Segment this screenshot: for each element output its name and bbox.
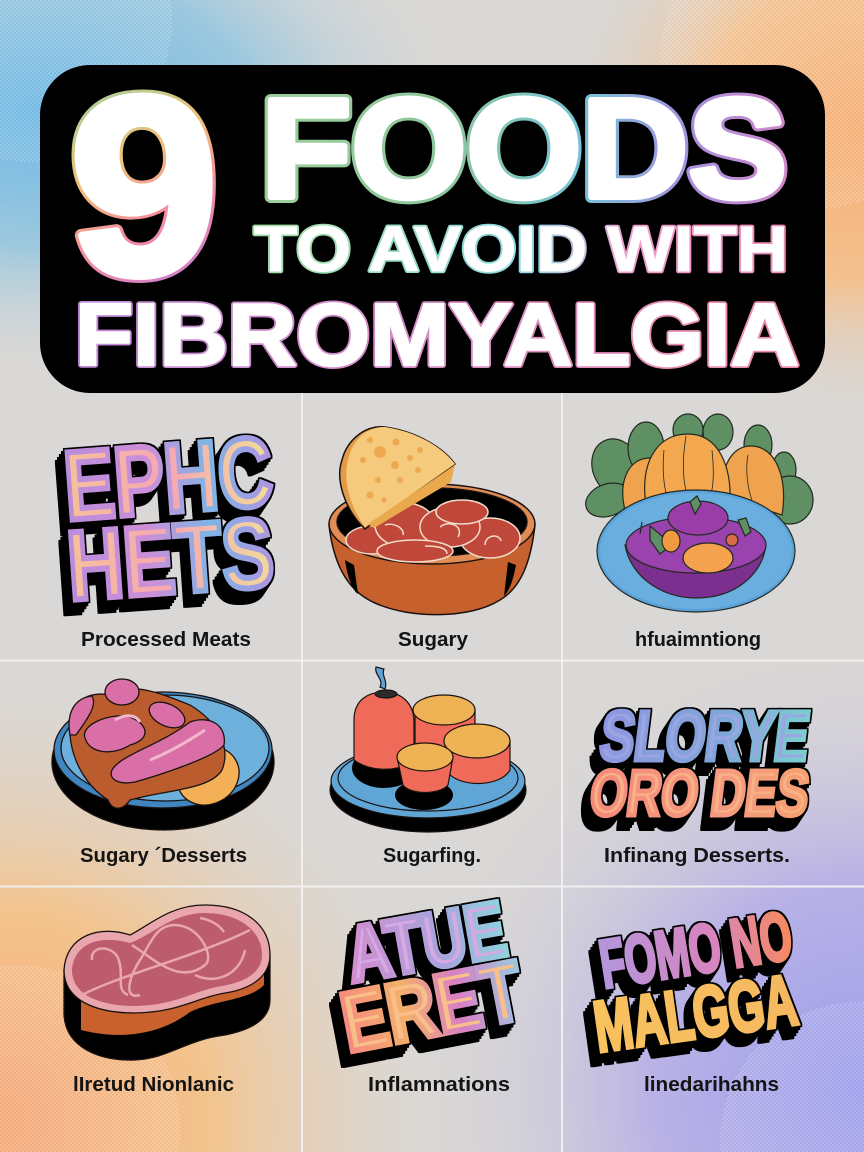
heading: TO AVOID WITH: TO AVOID WITH <box>254 213 788 285</box>
lettering: ATUE ERET: ERET <box>333 943 530 1070</box>
lettering: ATUE ERET <box>333 884 530 1070</box>
panel 4: plate with meat <box>52 679 274 867</box>
heading: FOODS: FOODS <box>261 69 787 227</box>
label: linedarihahns: linedarihahns <box>644 1074 779 1096</box>
icon: meat on blue plate <box>52 679 274 830</box>
panel 3: plate with purple dish <box>581 414 813 651</box>
icon: bowl with bread <box>329 427 535 615</box>
lettering: EPHC HETS: HETS <box>64 497 277 621</box>
panel 8: lettering and label <box>333 884 530 1096</box>
lettering: FOMO NO MALGGA <box>589 898 802 1068</box>
lettering: SLORYE ORO DES <box>586 696 814 829</box>
heading: FIBROMYALGIA: FIBROMYALGIA <box>75 285 799 384</box>
label: Infinang Desserts.: Infinang Desserts. <box>604 845 790 867</box>
panel 2: bowl of meat with bread <box>329 427 535 651</box>
icon: bottle and cups on a plate <box>330 667 526 832</box>
panel 6: lettering and label <box>586 696 814 867</box>
panel 7: steak and label <box>64 905 270 1096</box>
lettering: EPHC HETS: EPHC <box>60 416 276 541</box>
heading: TO AVOID WITH: TO AVOID WITH <box>254 213 788 285</box>
panel 5: plate with bottle and cups <box>330 667 526 867</box>
heading: FOODS: FOODS <box>261 69 787 227</box>
heading: 9: 9 <box>69 44 219 329</box>
label: lIretud Nionlanic: lIretud Nionlanic <box>73 1074 234 1096</box>
label: hfuaimntiong: hfuaimntiong <box>635 629 761 651</box>
lettering: ATUE ERET: ATUE <box>340 884 513 999</box>
panel 9: lettering and label <box>589 898 802 1096</box>
label: Processed Meats: Processed Meats <box>81 629 251 651</box>
lettering: EPHC HETS <box>60 416 277 621</box>
title banner <box>40 44 825 393</box>
icon: plate with squash and greens <box>581 414 813 612</box>
icon: steak <box>64 905 270 1060</box>
panel 1: lettering and label <box>60 416 277 651</box>
label: Sugary 'Desserts: Sugary ´Desserts <box>80 845 247 867</box>
heading: 9: 9 <box>69 44 219 329</box>
label: Sugarfing.: Sugarfing. <box>383 845 481 867</box>
label: Inflamnations: Inflamnations <box>368 1074 510 1096</box>
heading: FIBROMYALGIA: FIBROMYALGIA <box>75 285 799 384</box>
label: Sugary: Sugary <box>398 629 469 651</box>
